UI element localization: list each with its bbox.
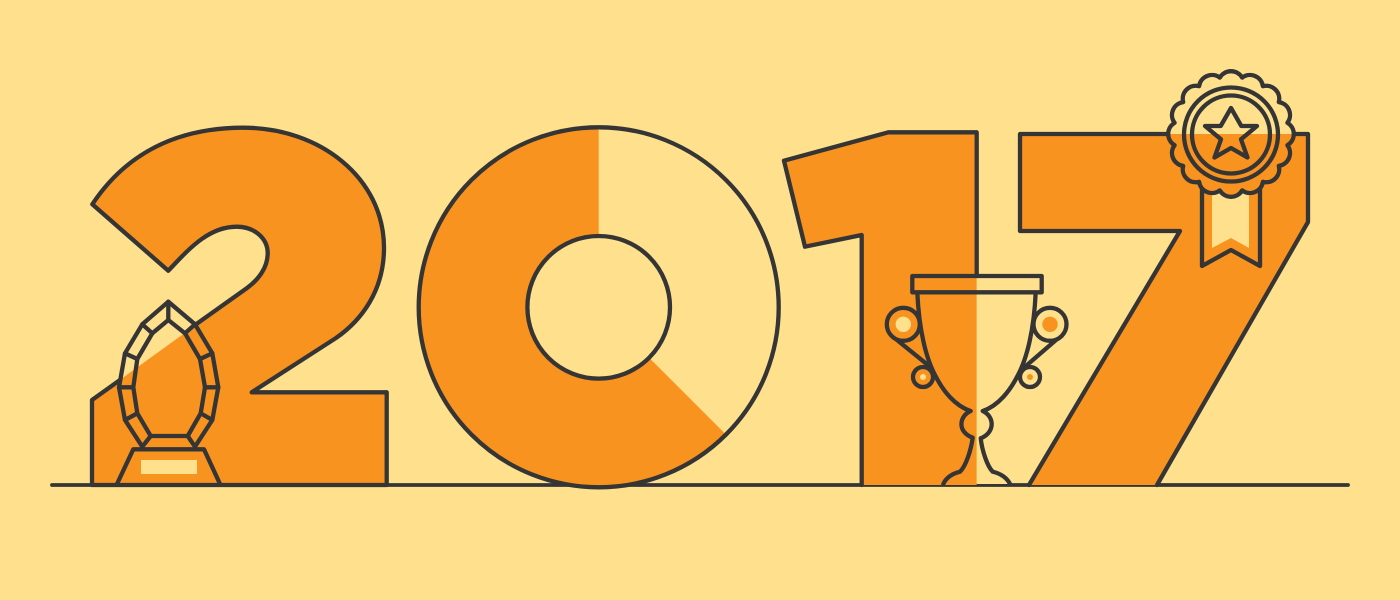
icon: trophy cup: [887, 276, 1066, 484]
right handle: [1020, 308, 1066, 387]
trophy plaque: [141, 460, 197, 474]
cup body: [917, 292, 977, 484]
digit 0: [419, 127, 779, 487]
left handle: [887, 308, 933, 387]
illustration: 2017 with awards: [50, 69, 1350, 490]
ribbon tail: [1202, 185, 1260, 266]
icon: ribbon badge: [1168, 71, 1294, 266]
rosette: [1168, 71, 1294, 197]
digit 2: [92, 128, 387, 485]
icon: crystal trophy: [117, 302, 220, 484]
digit 1: [784, 132, 977, 485]
baseline: [52, 483, 1348, 487]
digit 7: [1020, 134, 1308, 485]
cup rim: [912, 276, 1042, 292]
star: [1205, 108, 1257, 158]
